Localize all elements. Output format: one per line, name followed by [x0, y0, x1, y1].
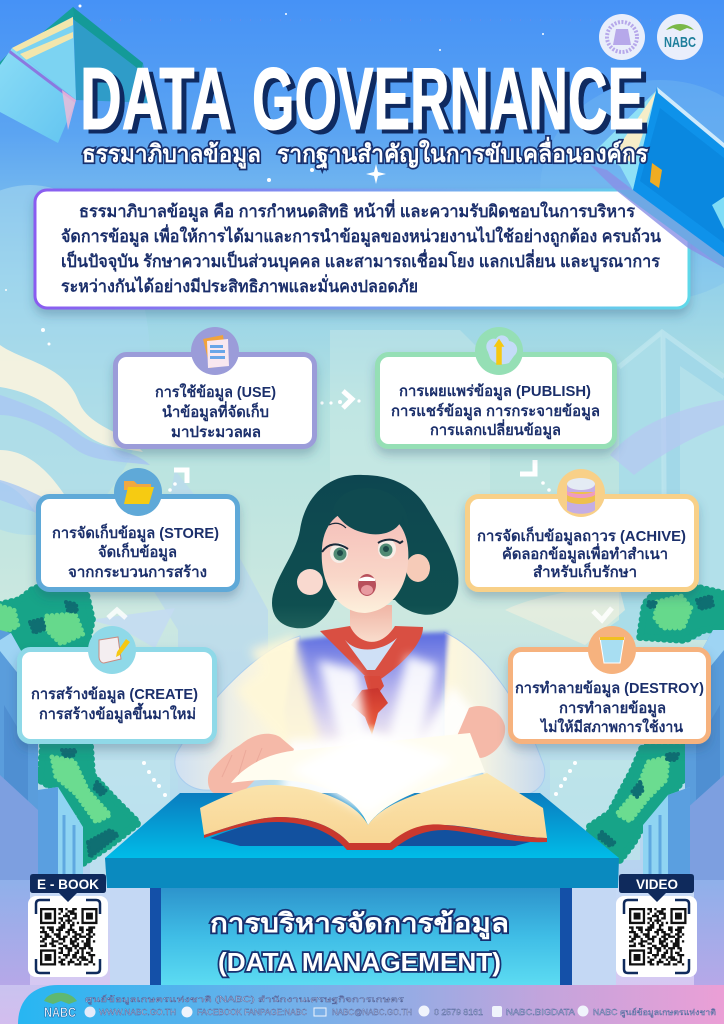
neck [350, 605, 392, 651]
contact row: NABC.BIGDATA [506, 1008, 576, 1017]
contact row [84, 1006, 716, 1018]
ear right [406, 554, 430, 582]
heading: data management: การบริหารจัดการข้อมูล [210, 908, 509, 940]
icon: document [191, 327, 239, 375]
arrow: create to store [108, 610, 126, 618]
bottom columns [0, 880, 724, 985]
contact row: NABC ศูนย์ข้อมูลเกษตรแห่งชาติ [593, 1007, 716, 1018]
text: use: นำข้อมูลที่จัดเก็บ [162, 401, 269, 422]
card: publish [378, 327, 614, 446]
trees [0, 587, 724, 863]
definition text: เป็นปัจจุบัน รักษาความเป็นส่วนบุคคล และสามารถเชื่อมโยง แลกเปลี่ยน และบูรณาการ [61, 249, 661, 273]
turning page [231, 733, 485, 825]
text: create [31, 686, 198, 724]
heading: data management [210, 908, 509, 977]
subtitle: ธรรมาภิบาลข้อมูล [82, 141, 261, 169]
torso [284, 632, 448, 752]
arrow: publish to archive [520, 460, 551, 492]
arrow: archive to destroy [593, 608, 612, 620]
left eye [322, 523, 348, 563]
heading: data management: (DATA MANAGEMENT) [218, 947, 501, 977]
open book [200, 730, 547, 850]
hair [272, 475, 458, 628]
text: store: จากกระบวนการสร้าง [68, 564, 207, 581]
text: archive: สำหรับเก็บรักษา [533, 562, 637, 581]
contact row: NABC@NABC.GO.TH [332, 1008, 412, 1017]
footer title: ศูนย์ข้อมูลเกษตรแห่งชาติ (NABC) สำนักงานเศรษฐกิจการเกษตร [85, 994, 405, 1005]
pedestal top [105, 793, 619, 858]
label: video: VIDEO [636, 876, 678, 892]
collar and scarf [320, 626, 423, 735]
card: store [38, 468, 238, 590]
ear left [297, 569, 323, 595]
pedestal body [150, 888, 572, 985]
text: archive [477, 526, 686, 581]
building right [643, 630, 724, 880]
definition text: จัดการข้อมูล เพื่อให้การได้มาและการนำข้อมูลของหน่วยงานไปใช้อย่างถูกต้อง ครบถ้วน [61, 224, 661, 248]
icon: bin [588, 626, 636, 674]
icon: database [557, 469, 605, 517]
footer logo: NABC [44, 1004, 76, 1020]
title: DATA [85, 53, 237, 152]
logo: NABC [657, 14, 703, 60]
title [80, 49, 649, 152]
light rays [235, 635, 485, 835]
subtitle: รากฐานสำคัญในการขับเคลื่อนองค์กร [277, 136, 648, 170]
footer logo [44, 993, 77, 1020]
qr: video [616, 874, 697, 977]
arrow: store to use [168, 470, 187, 492]
sleeves [175, 632, 545, 796]
contact row: FACEBOOK FANPAGE:NABC [197, 1008, 307, 1017]
text: store: การจัดเก็บข้อมูล (STORE) [52, 523, 219, 543]
definition text: ระหว่างกันได้อย่างมีประสิทธิภาพและมั่นคงปลอดภัย [61, 274, 418, 296]
right hand [457, 706, 505, 758]
title: DATA [80, 49, 232, 148]
text: destroy: การทำลายข้อมูล (DESTROY) [515, 680, 704, 698]
text: destroy: การทำลายข้อมูล [559, 700, 666, 718]
page glow [290, 730, 453, 815]
qr: e-book [28, 874, 108, 977]
stars [5, 4, 544, 346]
icon: cloud upload [475, 327, 523, 375]
arrow: use to publish [320, 391, 361, 408]
panel: definition [35, 190, 689, 308]
text: store: จัดเก็บข้อมูล [98, 542, 177, 562]
fringe [333, 488, 409, 538]
text: destroy: ไม่ให้มีสภาพการใช้งาน [539, 717, 684, 736]
contact row: 0 2579 8161 [434, 1008, 484, 1017]
text: store [52, 523, 219, 581]
text: destroy [515, 680, 704, 736]
text: create: การสร้างข้อมูล (CREATE) [31, 686, 198, 704]
icon: notepad and pencil [88, 626, 136, 674]
building: pale tower right [590, 330, 724, 640]
text: publish: การเผยแพร่ข้อมูล (PUBLISH) [399, 383, 591, 401]
text: archive: คัดลอกข้อมูลเพื่อทำสำเนา [502, 543, 668, 564]
text: publish [391, 383, 600, 440]
logo: ministry seal [599, 14, 645, 60]
text: archive: การจัดเก็บข้อมูลถาวร (ACHIVE) [477, 526, 686, 546]
contact row: WWW.NABC.GO.TH [99, 1008, 176, 1017]
logo: NABC: NABC [664, 34, 696, 51]
definition text: ธรรมาภิบาลข้อมูล คือ การกำหนดสิทธิ หน้าที่ และความรับผิดชอบในการบริหาร [79, 199, 636, 223]
book illustration: top right [590, 87, 724, 268]
definition text [61, 199, 661, 296]
pedestal band [105, 858, 619, 888]
card: create [20, 626, 214, 742]
text: use: การใช้ข้อมูล (USE) [155, 383, 276, 402]
text: create: การสร้างข้อมูลขึ้นมาใหม่ [39, 702, 196, 724]
label: e-book: E - BOOK [37, 876, 99, 892]
text: use [155, 383, 276, 441]
text: publish: การแลกเปลี่ยนข้อมูล [430, 419, 561, 440]
footer [18, 985, 724, 1024]
left hand [208, 734, 294, 793]
card: use [116, 327, 314, 446]
icon: folder [114, 468, 162, 516]
text: use: มาประมวลผล [171, 424, 261, 441]
card: destroy [510, 626, 708, 742]
face [322, 508, 408, 613]
book illustration: top left [0, 7, 152, 143]
character: student [175, 475, 545, 835]
mouth [358, 574, 376, 596]
subtitle [82, 136, 648, 170]
card: archive [468, 469, 696, 590]
right eye [378, 539, 403, 559]
dotted trails [142, 761, 577, 797]
pedestal [105, 793, 619, 985]
building left [0, 630, 83, 880]
text: publish: การแชร์ข้อมูล การกระจายข้อมูล [391, 402, 600, 421]
